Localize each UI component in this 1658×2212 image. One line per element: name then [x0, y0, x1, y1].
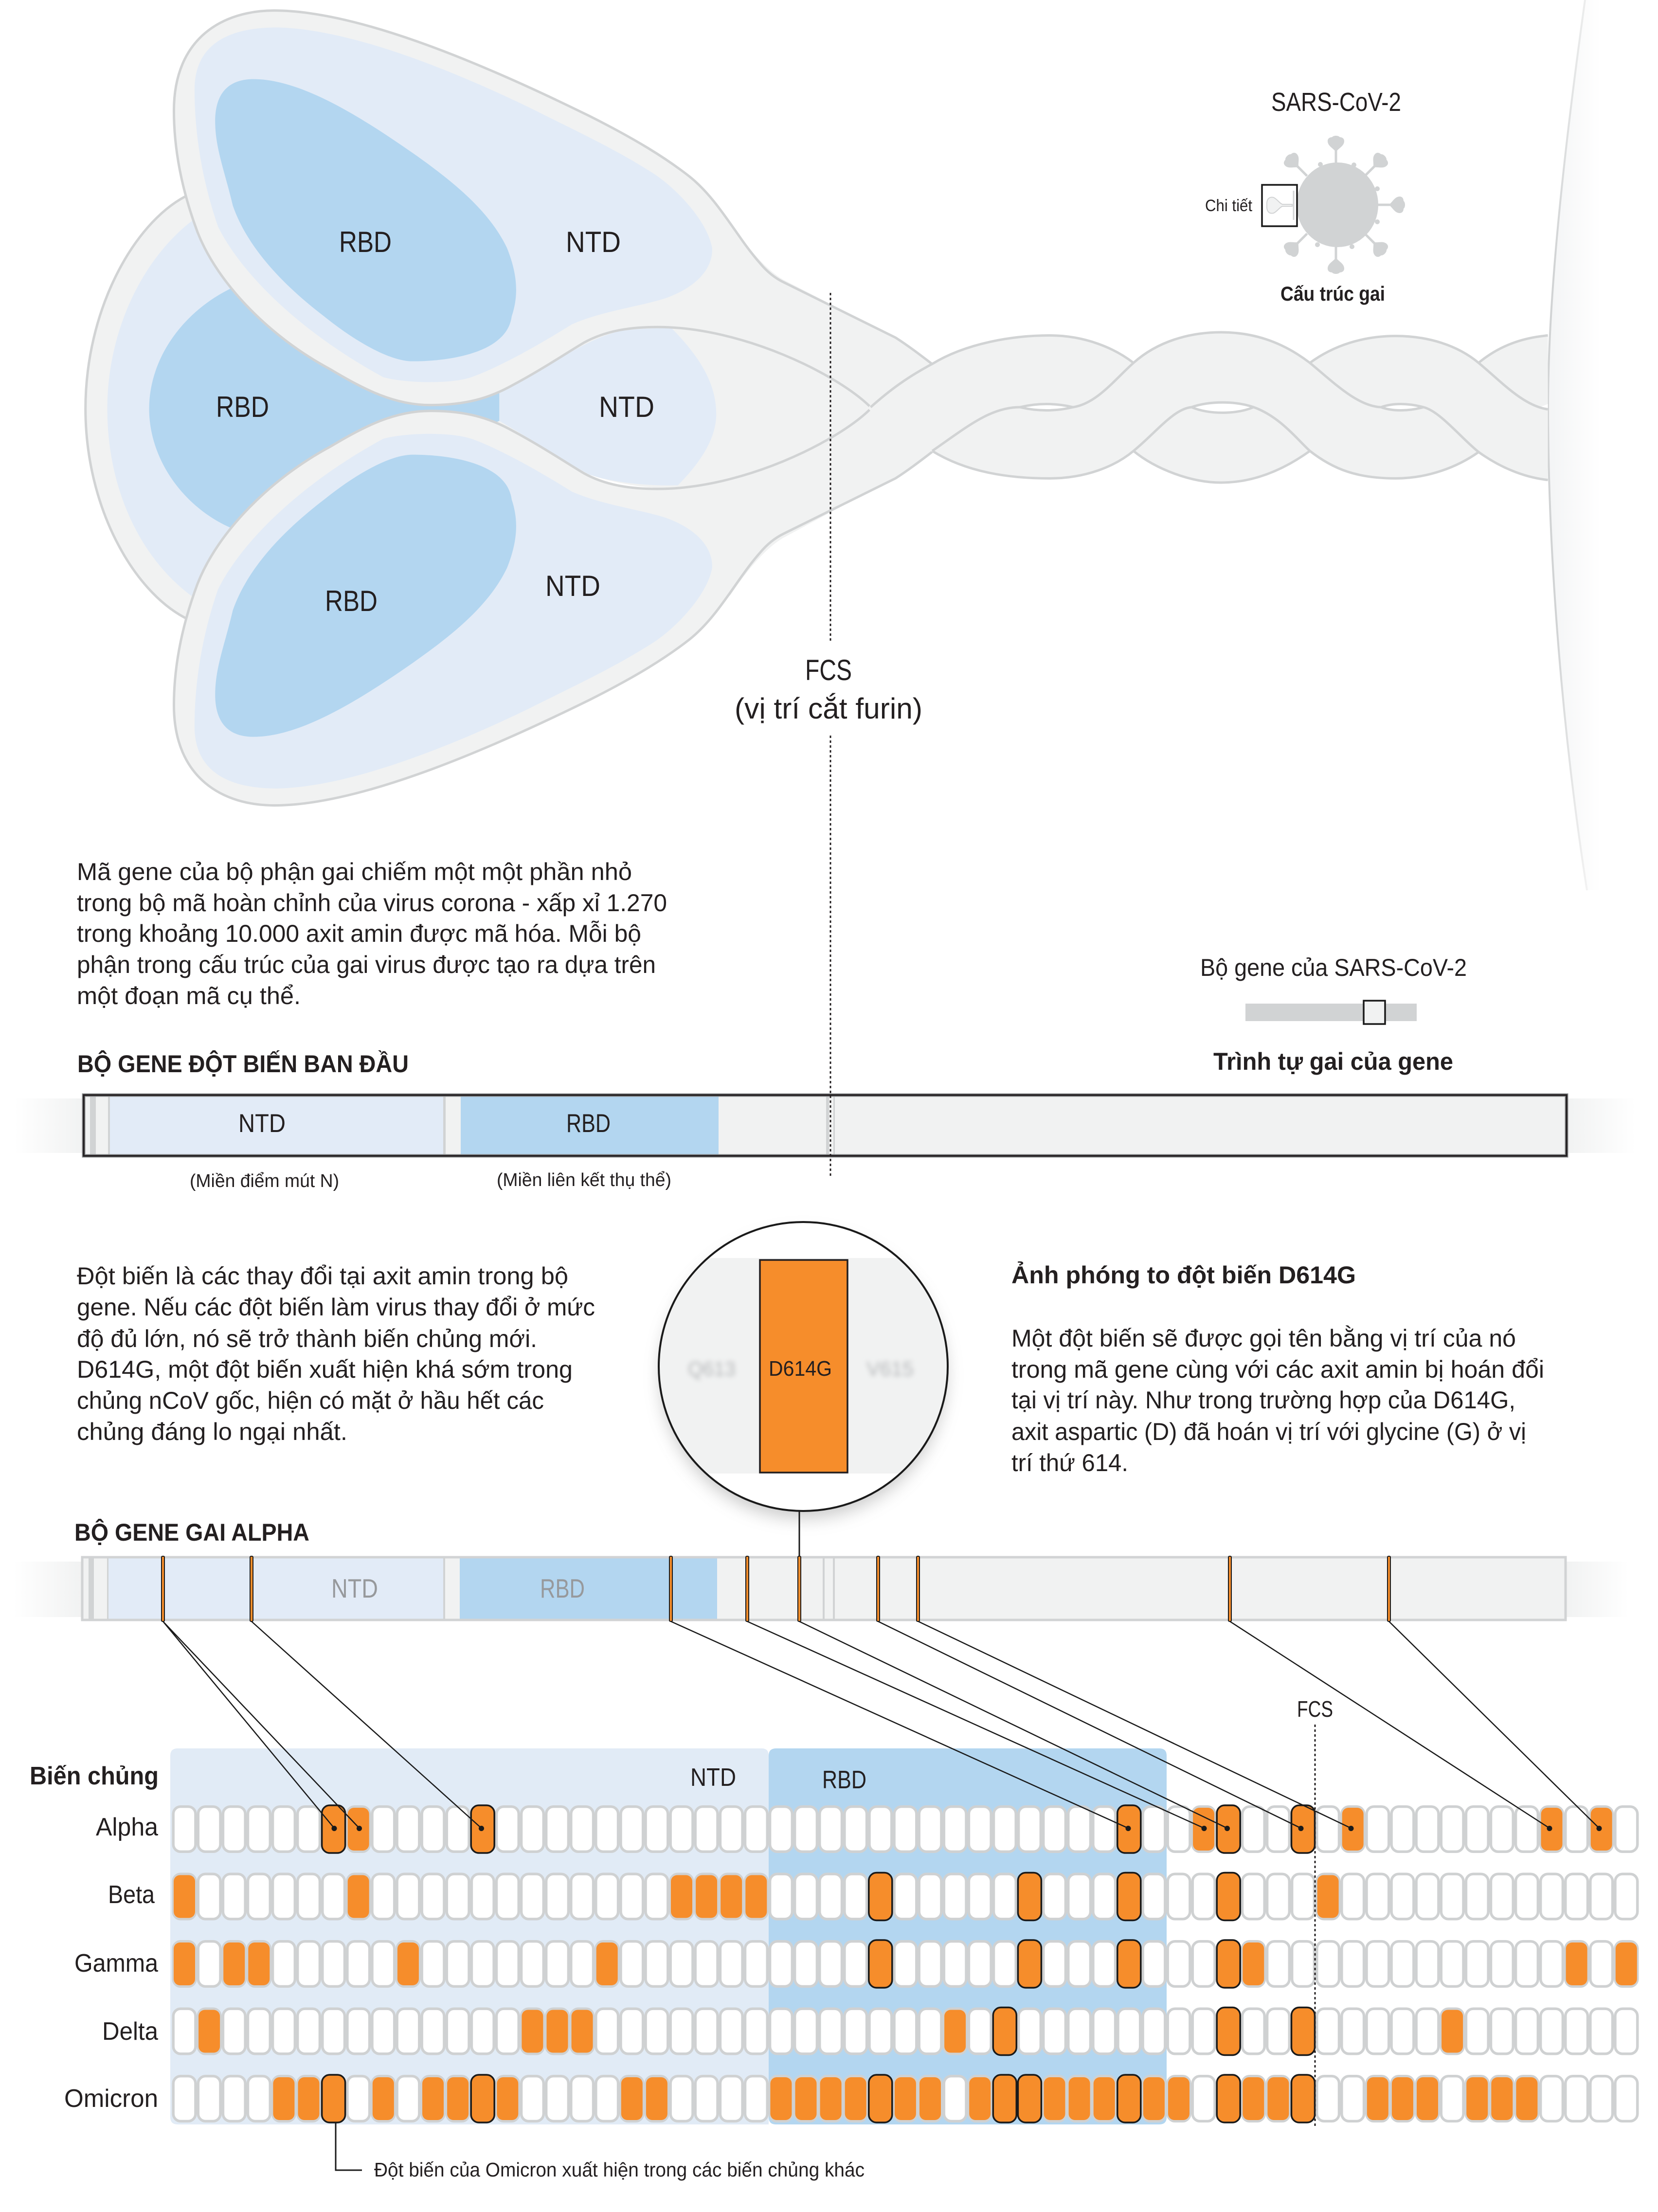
text block: mutations: Đột biến là các thay đổi tại axit amin trong bộ — [77, 1262, 568, 1290]
membrane edge — [1548, 0, 1587, 890]
blurred neighbours: Q613 — [688, 1357, 736, 1380]
heading: alpha gene: BỘ GENE GAI ALPHA — [74, 1518, 309, 1546]
text block: mutations — [77, 1262, 595, 1445]
label: NTD top: NTD — [566, 226, 621, 258]
panel: NTD background — [170, 1748, 769, 2124]
label: FCS — [735, 654, 922, 725]
text block: naming: axit aspartic (D) đã hoán vị trí với glycine (G) ở vị — [1011, 1418, 1526, 1445]
caption: N-terminal domain: (Miền điểm mút N) — [190, 1171, 339, 1191]
heading: original gene: BỘ GENE ĐỘT BIẾN BAN ĐẦU — [77, 1050, 409, 1078]
label: FCS: FCS — [805, 654, 852, 686]
bar label: RBD: RBD — [566, 1109, 611, 1138]
mutation ticks — [162, 1556, 1390, 1621]
label: Chi tiết: Chi tiết — [1205, 197, 1252, 215]
cell membrane — [1548, 0, 1605, 890]
text block: spike gene intro — [77, 858, 667, 1009]
caption: receptor-binding domain: (Miền liên kết thụ thể) — [497, 1170, 671, 1190]
heading: D614G: Ảnh phóng to đột biến D614G — [1011, 1261, 1356, 1289]
bottom lobe NTD region — [195, 434, 712, 789]
label: spike sequence: Trình tự gai của gene — [1213, 1048, 1453, 1075]
row label: Gamma: Gamma — [74, 1949, 158, 1978]
text block: spike gene intro: trong bộ mã hoàn chỉnh của virus corona - xấp xỉ 1.270 — [77, 889, 667, 917]
title: SARS-CoV-2: SARS-CoV-2 — [1271, 88, 1401, 117]
label: D614G: D614G — [769, 1357, 832, 1381]
bottom lobe — [174, 410, 932, 806]
label: FCS lower: FCS — [1297, 1696, 1333, 1722]
stem outlines — [871, 332, 1548, 483]
row label: Alpha: Alpha — [96, 1813, 158, 1841]
text block: mutations: chủng nCoV gốc, hiện có mặt ở hầu hết các — [77, 1387, 544, 1414]
panel: RBD background — [769, 1748, 1167, 2124]
panel label: NTD: NTD — [690, 1763, 736, 1792]
row: Delta — [172, 2007, 1639, 2055]
detail box with spike — [1262, 185, 1297, 226]
top lobe RBD region — [215, 79, 516, 361]
surface bumps — [1315, 162, 1380, 249]
callout: Omicron mutations: Đột biến của Omicron xuất hiện trong các biến chủng khác — [374, 2158, 865, 2181]
heading: variants: Biến chủng — [30, 1762, 159, 1790]
middle lobe outline — [86, 196, 186, 618]
gene bar: original — [14, 1095, 1636, 1156]
label: NTD bottom: NTD — [545, 570, 600, 602]
text block: mutations: độ đủ lớn, nó sẽ trở thành biến chủng mới. — [77, 1325, 537, 1352]
icon: genome bar — [1245, 1001, 1417, 1024]
row: Beta — [172, 1873, 1639, 1921]
text block: spike gene intro: Mã gene của bộ phận gai chiếm một một phần nhỏ — [77, 858, 632, 885]
text block: naming: trí thứ 614. — [1011, 1449, 1128, 1476]
label: FCS: (vị trí cắt furin) — [735, 692, 922, 725]
row: Gamma — [172, 1940, 1639, 1988]
callout: Omicron mutations — [336, 2122, 865, 2181]
braided stem — [871, 332, 1548, 483]
text block: naming: tại vị trí này. Như trong trường hợp của D614G, — [1011, 1386, 1515, 1414]
row label: Omicron: Omicron — [64, 2085, 158, 2113]
bottom lobe outline — [174, 410, 932, 806]
bar label: RBD: RBD — [540, 1573, 585, 1603]
stem lens gaps — [1020, 402, 1548, 413]
connector: magnifier to bar — [799, 1511, 800, 1557]
top lobe outline — [174, 11, 932, 406]
text block: naming — [1011, 1325, 1544, 1476]
row label: Beta: Beta — [108, 1881, 155, 1909]
middle lobe — [86, 196, 869, 618]
middle lobe NTD region left — [108, 219, 306, 596]
braid fill — [730, 221, 1548, 596]
bar label: NTD: NTD — [238, 1109, 286, 1138]
label: Cấu trúc gai: Cấu trúc gai — [1280, 282, 1385, 305]
label: RBD middle: RBD — [216, 391, 269, 423]
text block: spike gene intro: một đoạn mã cụ thể. — [77, 982, 301, 1009]
magnifier: D614G: V615 — [866, 1357, 914, 1380]
text block: mutations: gene. Nếu các đột biến làm virus thay đổi ở mức — [77, 1294, 595, 1321]
row label: Delta: Delta — [102, 2017, 158, 2046]
bottom lobe RBD region — [215, 455, 516, 737]
text block: spike gene intro: trong khoảng 10.000 axit amin được mã hóa. Mỗi bộ — [77, 920, 641, 947]
label: RBD bottom: RBD — [325, 585, 378, 617]
middle lobe RBD region — [149, 288, 499, 527]
icon: virus with spikes — [1262, 136, 1405, 274]
text block: mutations: D614G, một đột biến xuất hiện khá sớm trong — [77, 1356, 573, 1383]
connectors: gene ticks to Alpha row — [163, 1621, 1602, 1831]
middle lobe NTD region right — [499, 328, 716, 486]
FCS dotted line lower — [1315, 1725, 1316, 2128]
top lobe — [174, 11, 932, 406]
top lobe NTD region — [195, 27, 712, 382]
magnifier: D614G — [652, 1222, 954, 1518]
text block: mutations: chủng đáng lo ngại nhất. — [77, 1418, 347, 1445]
illustration: spike protein structure — [86, 0, 1605, 890]
gene bar: alpha — [13, 1556, 1629, 1621]
text block: naming: Một đột biến sẽ được gọi tên bằng vị trí của nó — [1011, 1325, 1516, 1352]
label: SARS-CoV-2 genome: Bộ gene của SARS-CoV-2 — [1200, 954, 1467, 981]
text block: naming: trong mã gene cùng với các axit amin bị hoán đổi — [1011, 1356, 1544, 1383]
bar label: NTD: NTD — [331, 1573, 378, 1603]
row: Alpha — [172, 1805, 1639, 1853]
label: RBD top: RBD — [339, 226, 392, 258]
orange mutation bar — [760, 1260, 847, 1473]
panel label: RBD: RBD — [822, 1766, 866, 1794]
FCS dotted line — [830, 293, 831, 1177]
row: Omicron — [172, 2075, 1639, 2122]
label: NTD middle: NTD — [599, 391, 654, 423]
text block: spike gene intro: phận trong cấu trúc của gai virus được tạo ra dựa trên — [77, 951, 656, 978]
